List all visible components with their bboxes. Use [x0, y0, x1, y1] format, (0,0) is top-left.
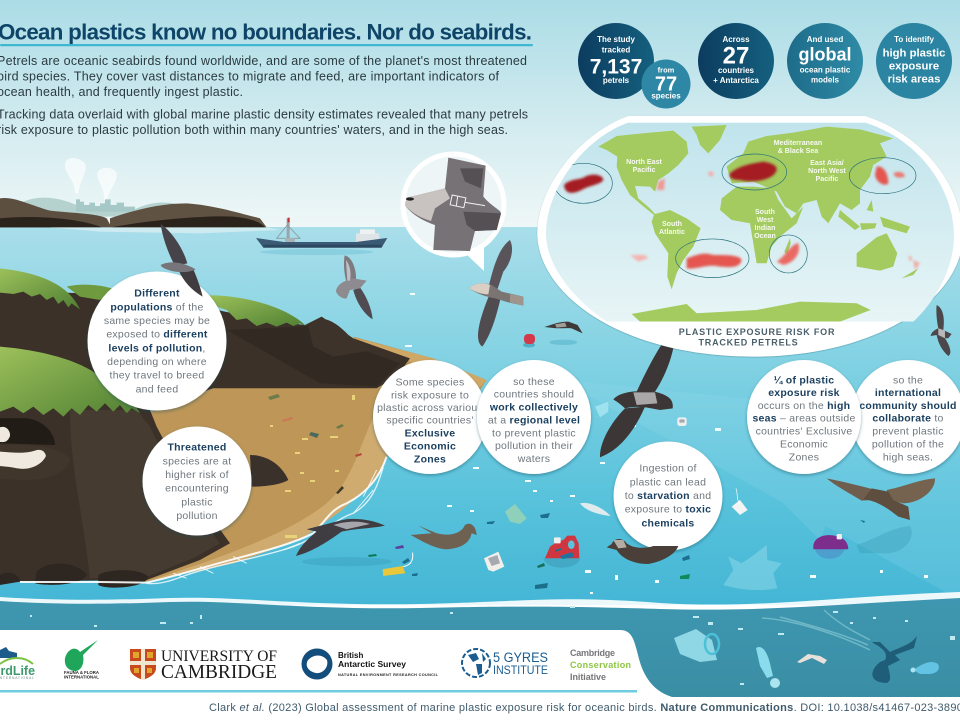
- callout: work collectively: waters: [517, 453, 550, 465]
- logo: British Antarctic Survey: NATURAL ENVIRONMENT RESEARCH COUNCIL: [338, 673, 439, 677]
- icon: small tub: [677, 417, 687, 426]
- title: Ocean plastics know no boundaries. Nor do seabirds.: [0, 20, 532, 44]
- callout: work collectively: at a regional level: [488, 415, 580, 427]
- callout: threatened species: higher risk of: [165, 469, 229, 481]
- stat: tracked petrels: 7,137: [590, 55, 642, 78]
- stat: countries: [698, 23, 774, 99]
- callout: populations: exposed to different: [106, 329, 208, 341]
- callout: populations: they travel to breed: [110, 370, 204, 382]
- logo: 5 Gyres Institute: INSTITUTE: [493, 663, 548, 677]
- callout: exclusive economic zones: Economic: [404, 440, 456, 452]
- distant hills and city: [0, 158, 280, 233]
- logo: Cambridge Conservation Initiative: Initiative: [570, 672, 606, 682]
- birds: [161, 224, 952, 566]
- callout: work collectively: countries should: [494, 389, 574, 401]
- callout: work collectively: to prevent plastic: [492, 427, 576, 439]
- callout: high seas: [747, 360, 861, 474]
- callout: high seas: Economic: [780, 438, 828, 450]
- callout: work collectively: pollution in their: [495, 440, 573, 452]
- intro text: [0, 54, 527, 99]
- stat: countries: + Antarctica: [713, 76, 759, 85]
- stat: risk areas: high plastic: [883, 48, 945, 60]
- callout: international community: community should: [859, 400, 957, 412]
- foreground debris in deep water: [30, 606, 955, 688]
- bird: tagged petrel: [469, 240, 523, 347]
- icon: crushed bottle: [910, 662, 939, 674]
- panel: world map: [537, 116, 960, 357]
- callout: threatened species: encountering: [165, 483, 229, 495]
- ocean region labels: Indian: [755, 224, 775, 232]
- ocean region labels: South: [755, 208, 775, 216]
- callout: high seas: ¼ of plastic: [774, 374, 834, 386]
- ocean region labels: West: [757, 216, 774, 224]
- bird: floating brown: [411, 524, 477, 549]
- dark rock: [0, 290, 410, 582]
- grass lower: [0, 347, 140, 417]
- stat: global models: [787, 23, 863, 99]
- headland cliff and beach: [0, 268, 487, 588]
- ocean region labels: North West: [808, 167, 846, 175]
- callout: exclusive economic zones: risk exposure to: [391, 389, 469, 401]
- grass upper: [0, 268, 80, 309]
- callout: exclusive economic zones: Zones: [414, 453, 446, 465]
- callout: international community: collaborate to: [872, 413, 944, 425]
- map caption: [679, 327, 835, 348]
- callout: high seas: Zones: [789, 451, 819, 463]
- icon: bottle: [756, 647, 780, 688]
- bird: right edge: [931, 305, 952, 356]
- speech bubble: tag detail: [400, 152, 506, 271]
- callout: international community: prevent plastic: [872, 426, 944, 438]
- callout: work collectively: [477, 360, 591, 474]
- callout: threatened species: [142, 426, 252, 536]
- stat: species: from: [658, 66, 675, 75]
- logo: Fauna & Flora: INTERNATIONAL: [64, 674, 99, 680]
- tracking text: risk exposure to plastic pollution both within many countries' waters, and in the high seas.: [0, 123, 508, 137]
- logo: Cambridge Conservation Initiative: Conservation: [570, 660, 631, 670]
- callout: exclusive economic zones: plastic across various: [377, 402, 483, 414]
- stat: risk areas: exposure: [889, 60, 939, 72]
- callout: exclusive economic zones: [373, 360, 487, 474]
- callout: international community: pollution of the: [872, 438, 944, 450]
- map caption: PLASTIC EXPOSURE RISK FOR: [679, 327, 835, 337]
- callout: ingestion: Ingestion of: [639, 463, 697, 475]
- litter on the beach: [268, 394, 362, 538]
- icon: purple bottle: [813, 534, 848, 559]
- logo: British Antarctic Survey: Antarctic Survey: [338, 660, 407, 669]
- callout: threatened species: plastic: [181, 496, 213, 508]
- callout: populations: populations of the: [110, 301, 204, 313]
- callout: international community: international: [875, 387, 941, 399]
- callout: populations: and feed: [136, 383, 178, 395]
- bird: brown hovering: [827, 478, 935, 553]
- beach sand: [100, 337, 487, 582]
- bird: over sea: [336, 255, 373, 319]
- intro text: bird species. They cover vast distances to migrate and feed, are important indicators of: [0, 70, 500, 84]
- citation: Clark et al. (2023) Global assessment of marine plastic exposure risk for oceanic birds. Nature Communications. DOI: 10.1038/s41467-023-38900-z: [209, 702, 960, 714]
- callout: ingestion: to starvation and: [625, 490, 711, 502]
- stat: risk areas: risk areas: [888, 73, 940, 85]
- callout: international community: high seas.: [883, 451, 933, 463]
- logo: 5 Gyres Institute: 5 GYRES: [493, 650, 548, 665]
- stat: countries: Across: [722, 35, 750, 44]
- logo: British Antarctic Survey: British: [338, 651, 363, 660]
- callout: populations: Different: [134, 288, 180, 300]
- ocean region labels: Pacific: [816, 175, 838, 183]
- logo: BirdLife: [0, 647, 35, 680]
- callout: exclusive economic zones: Exclusive: [405, 428, 455, 440]
- logo: Fauna & Flora: FAUNA & FLORA: [64, 670, 99, 675]
- sky background: [0, 0, 960, 228]
- icon: green container: [505, 504, 527, 524]
- cargo ship: [256, 218, 387, 255]
- deep water foreground: [0, 592, 960, 700]
- map caption: TRACKED PETRELS: [698, 338, 799, 348]
- callout: work collectively: so these: [513, 376, 555, 388]
- floating plastic items in the sea: [368, 293, 928, 594]
- stat: global models: And used: [807, 35, 843, 44]
- bird: large soaring: [600, 327, 675, 457]
- ocean region labels: Mediterranean: [774, 139, 822, 147]
- icon: diving bird: [872, 636, 917, 683]
- ocean region labels: North East: [626, 158, 663, 166]
- stat: species: species: [651, 92, 681, 100]
- callout: threatened species: pollution: [176, 510, 218, 522]
- callout: exclusive economic zones: Some species: [396, 376, 464, 388]
- callout: international community: [851, 360, 960, 474]
- stat: tracked petrels: tracked: [602, 46, 630, 55]
- callout: ingestion: chemicals: [641, 517, 695, 529]
- ocean region labels: & Black Sea: [778, 147, 818, 155]
- icon: plastic fork: [797, 654, 827, 664]
- callout: ingestion: plastic can lead: [630, 477, 706, 489]
- ocean region labels: South: [662, 220, 682, 228]
- logo: University of Cambridge: [130, 648, 277, 683]
- icon: white tub: [484, 552, 504, 572]
- intro text: ocean health, and frequently ingest plastic.: [0, 85, 243, 99]
- logo: Cambridge Conservation Initiative: Cambridge: [570, 648, 615, 658]
- shoreline foam: [20, 457, 387, 583]
- callout: threatened species: species are at: [163, 455, 231, 467]
- stat: species: [642, 60, 690, 108]
- stat: risk areas: To identify: [894, 35, 934, 44]
- land: [598, 125, 918, 322]
- ocean region labels: East Asia/: [810, 159, 844, 167]
- rock boulders: [250, 455, 288, 487]
- icon: water splash: [723, 545, 782, 590]
- callout: international community: so the: [893, 374, 923, 386]
- stat: tracked petrels: [578, 23, 654, 99]
- icon: plastic bag: [580, 503, 611, 516]
- stat: tracked petrels: The study: [597, 35, 635, 44]
- sea background: [0, 227, 960, 605]
- plastic risk blobs: [564, 162, 920, 270]
- ocean region labels: Pacific: [633, 166, 655, 174]
- logo: University of Cambridge: UNIVERSITY OF: [161, 648, 277, 665]
- icon: red jug: [543, 536, 580, 568]
- icon: yellow sponge: [383, 553, 413, 576]
- tracking text: Tracking data overlaid with global marine plastic density estimates revealed that many petrels: [0, 108, 528, 122]
- logo panel: [0, 630, 960, 720]
- stat: global models: models: [811, 76, 840, 85]
- bird: swimming grey-brown: [296, 519, 392, 566]
- callout: high seas: seas – areas outside: [752, 413, 856, 425]
- icon: face mask: [674, 629, 719, 662]
- logo: British Antarctic Survey: [302, 648, 439, 680]
- stat: tracked petrels: petrels: [603, 76, 630, 85]
- stat: risk areas: [876, 23, 952, 99]
- stat: global models: ocean plastic: [800, 66, 851, 75]
- callout: threatened species: Threatened: [167, 442, 227, 454]
- icon: small red buoy: [523, 334, 535, 348]
- callout: populations: depending on where: [107, 356, 207, 368]
- stat: countries: countries: [718, 66, 755, 75]
- bird: sitting dark: [607, 539, 678, 564]
- callout: high seas: countries' Exclusive: [756, 426, 852, 438]
- callout: work collectively: work collectively: [489, 402, 578, 414]
- callout: ingestion: [614, 442, 722, 550]
- callout: populations: [88, 272, 226, 410]
- intro text: Petrels are oceanic seabirds found worldwide, and are some of the planet's most threatened: [0, 54, 527, 68]
- callout: high seas: exposure risk: [768, 387, 840, 399]
- callout: exclusive economic zones: specific countries': [386, 414, 474, 426]
- fishing line: [762, 610, 870, 650]
- logo: University of Cambridge: CAMBRIDGE: [161, 661, 277, 683]
- logo: 5 Gyres Institute: [462, 649, 548, 677]
- callout: populations: same species may be: [104, 315, 210, 327]
- ocean region labels: [626, 139, 846, 240]
- logo: Cambridge Conservation Initiative: [570, 648, 631, 682]
- callout: populations: levels of pollution,: [108, 342, 206, 354]
- ocean region labels: Ocean: [754, 232, 776, 240]
- stat: countries: 27: [723, 42, 749, 70]
- tracking text: [0, 108, 528, 137]
- icon: clear cup: [595, 402, 608, 417]
- bird: small flying: [544, 322, 583, 345]
- logo: Fauna & Flora: [64, 640, 99, 680]
- icon: white bag with cord: [732, 488, 748, 515]
- stat: species: 77: [655, 74, 677, 96]
- bird: top of cliff: [161, 224, 203, 297]
- stat: global models: global: [798, 44, 852, 64]
- birds in burrow: [0, 427, 10, 442]
- callout: high seas: occurs on the high: [758, 400, 850, 412]
- burrow: [0, 418, 55, 445]
- callout: ingestion: exposure to toxic: [625, 504, 711, 516]
- ocean region labels: Atlantic: [659, 228, 685, 236]
